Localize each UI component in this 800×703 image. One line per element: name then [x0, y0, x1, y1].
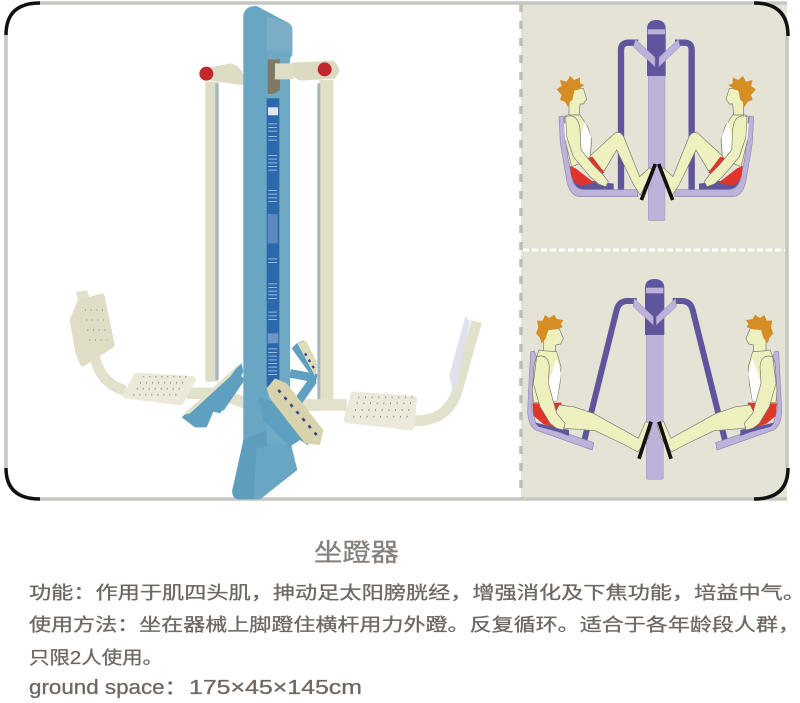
dashed panel divider: [519, 4, 523, 499]
back right pedal: [292, 341, 317, 380]
frame arms: [584, 301, 725, 442]
blue instruction plate: [267, 98, 279, 387]
left figure: [528, 315, 652, 452]
column head: [645, 279, 664, 335]
right figure: [660, 76, 756, 197]
panel: instruction diagrams background: [521, 4, 787, 499]
left pedal: [182, 363, 243, 427]
frame arches: [621, 43, 692, 190]
usage line 2: 只限2人使用。: [29, 648, 163, 668]
blue pedal brackets: [220, 373, 317, 442]
column head: [647, 20, 666, 76]
ground space label: ground space：: [29, 677, 187, 699]
foot plates: [639, 422, 671, 459]
rotating joint: [268, 59, 293, 94]
left figure: [557, 76, 652, 197]
left arm with red cap: [199, 63, 244, 85]
foot plates: [641, 164, 673, 200]
left seat plate: [126, 376, 193, 402]
diagram: legs extended position: [528, 279, 782, 479]
ground space dimensions: 175×45×145cm: [189, 677, 362, 699]
right arm with red cap and joint: [290, 61, 339, 81]
right figure: [657, 315, 782, 452]
center column: [646, 333, 663, 479]
function line: 功能：作用于肌四头肌，抻动足太阳膀胱经，增强消化及下焦功能，培益中气。: [29, 583, 800, 603]
equipment photo: seated leg press: [73, 6, 477, 499]
usage line: 使用方法：坐在器械上脚蹬住横杆用力外蹬。反复循环。适合于各年龄段人群，: [29, 615, 800, 635]
left back post: [205, 82, 219, 382]
right back post: [319, 80, 333, 403]
corner brackets: [6, 3, 788, 499]
right seat plate: [347, 395, 413, 427]
text block: description: [29, 583, 800, 699]
handles: [633, 298, 676, 325]
rear cross brace: [187, 393, 347, 405]
title: 坐蹬器: [314, 539, 399, 567]
left backrest and tube: [73, 291, 125, 391]
frame: [6, 3, 788, 499]
right tube and backrest: [413, 317, 477, 421]
main pillar: [232, 6, 297, 499]
handles: [633, 39, 680, 67]
center column: [648, 75, 665, 221]
diagram: legs bent position: [557, 20, 756, 221]
front pedal: [258, 378, 323, 447]
